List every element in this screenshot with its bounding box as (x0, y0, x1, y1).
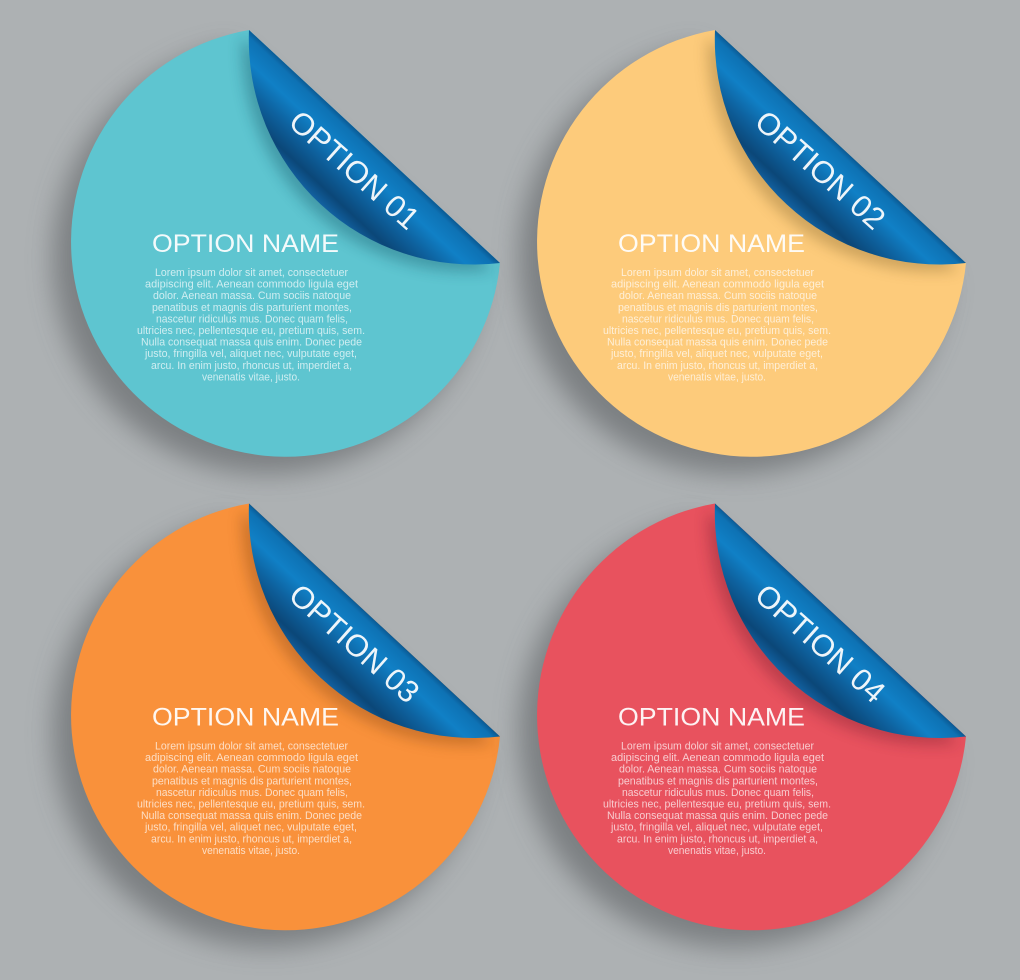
body text: Lorem ipsum dolor sit amet, consectetuer (155, 740, 348, 752)
body text (137, 267, 365, 383)
body text: arcu. In enim justo, rhoncus ut, imperdiet a, (617, 833, 818, 845)
body text (603, 267, 831, 383)
flap shadow (708, 510, 959, 745)
flap shadow (242, 510, 493, 745)
flap shadow (708, 37, 959, 272)
body text (137, 740, 365, 857)
yellow circle (537, 30, 966, 457)
body text: Nulla consequat massa quis enim. Donec pede (141, 337, 362, 349)
body text: Lorem ipsum dolor sit amet, consectetuer (621, 740, 814, 752)
body text: Nulla consequat massa quis enim. Donec pede (607, 337, 828, 349)
body text: venenatis vitae, justo. (668, 845, 766, 857)
body text: ultricies nec, pellentesque eu, pretium quis, sem. (137, 325, 365, 337)
blue folded flap (249, 504, 500, 738)
panel: option 02 (519, 30, 966, 474)
body text: nascetur ridiculus mus. Donec quam felis, (156, 313, 348, 325)
blue folded flap (249, 30, 500, 265)
body text: justo, fringilla vel, aliquet nec, vulputate eget, (610, 348, 823, 360)
sticker shadow (519, 520, 948, 947)
orange circle (71, 504, 500, 930)
red circle (537, 504, 966, 930)
panel: option 04 (519, 504, 966, 947)
body text: Nulla consequat massa quis enim. Donec pede (607, 810, 828, 822)
body text: nascetur ridiculus mus. Donec quam felis, (622, 313, 814, 325)
sticker shadow (519, 47, 948, 474)
body text: adipiscing elit. Aenean commodo ligula eget (611, 279, 824, 291)
body text: Nulla consequat massa quis enim. Donec pede (141, 810, 362, 822)
sticker shadow (53, 47, 482, 474)
body text (603, 740, 831, 857)
flap label: OPTION 02 (748, 104, 892, 236)
body text: arcu. In enim justo, rhoncus ut, imperdiet a, (151, 833, 352, 845)
body text: penatibus et magnis dis parturient montes, (618, 775, 818, 787)
body text: adipiscing elit. Aenean commodo ligula eget (145, 279, 358, 291)
blue folded flap (715, 504, 966, 738)
body text: Lorem ipsum dolor sit amet, consectetuer (155, 267, 348, 279)
heading: OPTION NAME (618, 230, 805, 258)
body text: ultricies nec, pellentesque eu, pretium quis, sem. (137, 798, 365, 810)
panel: option 03 (53, 504, 500, 947)
flap label: OPTION 04 (748, 577, 892, 710)
body text: nascetur ridiculus mus. Donec quam felis, (156, 787, 348, 799)
flap label: OPTION 03 (282, 577, 426, 710)
sticker shadow (53, 520, 482, 947)
body text: dolor. Aenean massa. Cum sociis natoque (619, 764, 817, 776)
body text: penatibus et magnis dis parturient montes, (152, 775, 352, 787)
body text: dolor. Aenean massa. Cum sociis natoque (153, 764, 351, 776)
heading: OPTION NAME (152, 230, 339, 258)
body text: penatibus et magnis dis parturient montes, (152, 302, 352, 314)
body text: justo, fringilla vel, aliquet nec, vulputate eget, (144, 822, 357, 834)
body text: nascetur ridiculus mus. Donec quam felis, (622, 787, 814, 799)
blue folded flap (715, 30, 966, 265)
body text: penatibus et magnis dis parturient montes, (618, 302, 818, 314)
body text: venenatis vitae, justo. (202, 845, 300, 857)
body text: justo, fringilla vel, aliquet nec, vulputate eget, (144, 348, 357, 360)
body text: justo, fringilla vel, aliquet nec, vulputate eget, (610, 822, 823, 834)
heading: OPTION NAME (618, 704, 805, 732)
body text: dolor. Aenean massa. Cum sociis natoque (619, 290, 817, 302)
body text: dolor. Aenean massa. Cum sociis natoque (153, 290, 351, 302)
body text: adipiscing elit. Aenean commodo ligula eget (145, 752, 358, 764)
body text: arcu. In enim justo, rhoncus ut, imperdiet a, (151, 360, 352, 372)
body text: venenatis vitae, justo. (202, 371, 300, 383)
body text: adipiscing elit. Aenean commodo ligula eget (611, 752, 824, 764)
body text: venenatis vitae, justo. (668, 371, 766, 383)
body text: ultricies nec, pellentesque eu, pretium quis, sem. (603, 798, 831, 810)
body text: ultricies nec, pellentesque eu, pretium quis, sem. (603, 325, 831, 337)
flap shadow (242, 37, 493, 272)
flap label: OPTION 01 (282, 104, 426, 236)
panel: option 01 (53, 30, 500, 474)
teal circle (71, 30, 500, 457)
body text: arcu. In enim justo, rhoncus ut, imperdiet a, (617, 360, 818, 372)
heading: OPTION NAME (152, 704, 339, 732)
body text: Lorem ipsum dolor sit amet, consectetuer (621, 267, 814, 279)
